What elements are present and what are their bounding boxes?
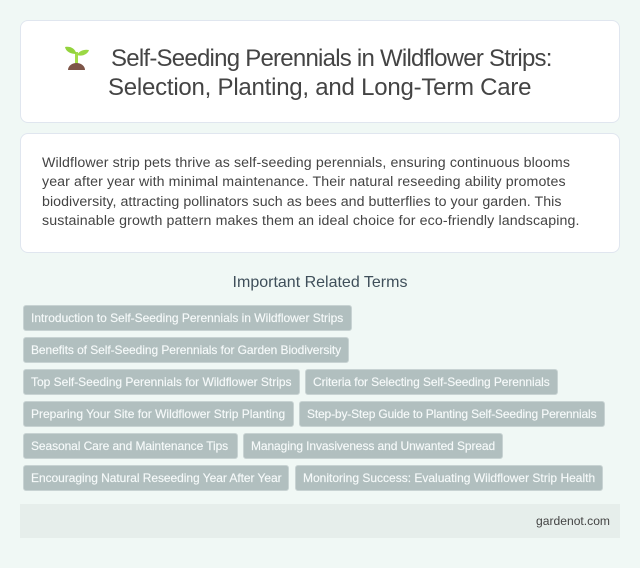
related terms tags [23, 305, 605, 491]
intro text: biodiversity, attracting pollinators such as bees and butterflies to your garden. This [42, 194, 562, 210]
intro text: Wildflower strip pets thrive as self-seeding perennials, ensuring continuous blooms [42, 155, 570, 171]
title text: Selection, Planting, and Long-Term Care [108, 74, 531, 101]
footer: gardenot.com [536, 514, 610, 528]
related terms tags: Managing Invasiveness and Unwanted Spread [251, 439, 495, 453]
related terms tags: Criteria for Selecting Self-Seeding Perennials [313, 375, 550, 389]
icon: seedling [65, 46, 89, 70]
intro text: sustainable growth pattern makes them an ideal choice for eco-friendly landscaping. [42, 213, 580, 229]
related terms tags: Top Self-Seeding Perennials for Wildflower Strips [31, 375, 291, 389]
title text: Self-Seeding Perennials in Wildflower Strips: [111, 45, 552, 72]
related terms tags: Monitoring Success: Evaluating Wildflower Strip Health [303, 471, 595, 485]
intro text: year after year with minimal maintenance. Their natural reseeding ability promotes [42, 174, 566, 190]
footer [20, 504, 620, 538]
intro text [42, 155, 580, 229]
related terms tags: Encouraging Natural Reseeding Year After Year [31, 471, 282, 485]
related terms tags: Benefits of Self-Seeding Perennials for Garden Biodiversity [31, 343, 341, 357]
intro panel [20, 133, 620, 253]
related terms tags: Preparing Your Site for Wildflower Strip Planting [31, 407, 285, 421]
heading: related terms: Important Related Terms [233, 274, 407, 291]
related terms tags: Step-by-Step Guide to Planting Self-Seeding Perennials [307, 407, 596, 421]
related terms tags: Introduction to Self-Seeding Perennials in Wildflower Strips [31, 311, 343, 325]
title card [20, 20, 620, 123]
related terms tags: Seasonal Care and Maintenance Tips [31, 439, 228, 453]
title text [108, 45, 552, 101]
